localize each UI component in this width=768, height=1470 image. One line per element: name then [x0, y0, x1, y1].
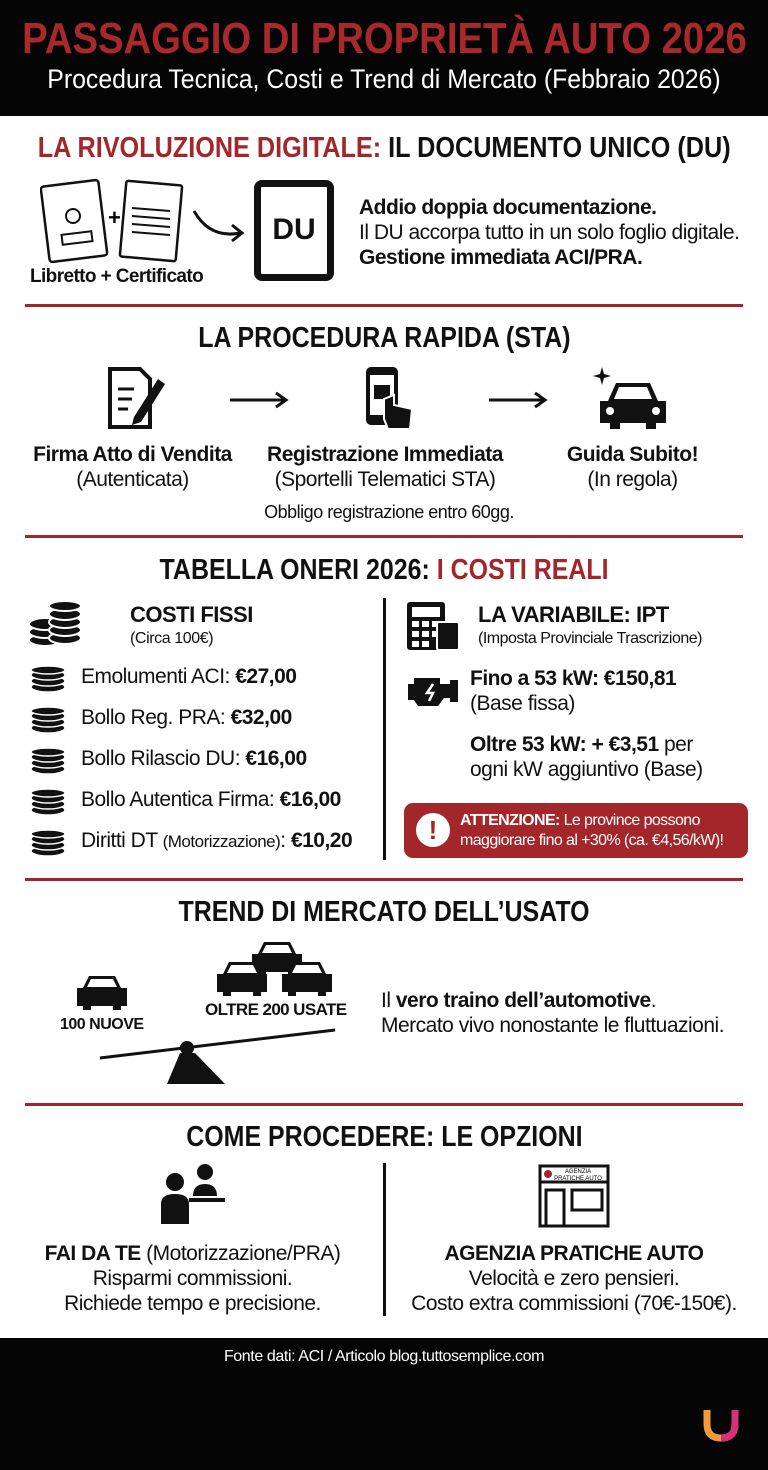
list: fixed costs: Emolumenti ACI: €27,00 [81, 665, 296, 688]
list: fixed costs [32, 665, 352, 856]
icon: document signing [108, 367, 165, 429]
section 3 heading: TABELLA ONERI 2026: I COSTI REALI [159, 554, 608, 586]
subtitle: Procedura Tecnica, Costi e Trend di Mercato (Febbraio 2026) [47, 64, 721, 94]
option: fai da te: Richiede tempo e precisione. [64, 1292, 321, 1315]
icon: coins [30, 602, 80, 645]
text: DU description [359, 196, 739, 269]
option: agenzia: Costo extra commissioni (70€-150€). [411, 1292, 737, 1315]
chart: seesaw new vs used: OLTRE 200 USATE [205, 1000, 347, 1019]
panel: IPT [404, 602, 748, 858]
step 3: Guida Subito! [567, 443, 698, 466]
callout: attenzione [404, 803, 748, 858]
callout: attenzione: ATTENZIONE: Le province possono [460, 812, 700, 829]
footer [0, 1338, 768, 1470]
step 1 [33, 367, 232, 491]
step 2: (Sportelli Telematici STA) [275, 468, 495, 491]
icon: DU tablet [254, 180, 334, 281]
section 4 heading: TREND DI MERCATO DELL’USATO [178, 896, 590, 928]
arrow [230, 392, 288, 408]
icon: agency storefront: AGENZIA [565, 1169, 591, 1175]
step 2: Registrazione Immediata [267, 443, 503, 466]
section 5 heading: COME PROCEDERE: LE OPZIONI [186, 1121, 582, 1153]
icon: engine [408, 678, 458, 706]
option: fai da te [45, 1164, 340, 1315]
step 1: (Autenticata) [76, 468, 189, 491]
title: PASSAGGIO DI PROPRIETÀ AUTO 2026 [22, 14, 746, 63]
arrow [192, 210, 244, 242]
panel: costi fissi [30, 602, 352, 856]
panel: IPT: Oltre 53 kW: + €3,51 per [470, 733, 693, 756]
callout: attenzione: maggiorare fino al +30% (ca. €4,56/kW)! [460, 832, 723, 849]
step 3 [567, 367, 698, 491]
text: DU description: Addio doppia documentazione. [359, 196, 656, 219]
list: fixed costs: Diritti DT (Motorizzazione): €10,20 [81, 829, 352, 852]
icon: logo [704, 1410, 738, 1442]
panel: IPT: ogni kW aggiuntivo (Base) [470, 758, 703, 781]
chart: seesaw new vs used: 100 NUOVE [60, 1016, 144, 1033]
step 2 [267, 367, 504, 491]
text: market trend: Il vero traino dell’automotive. [381, 989, 656, 1012]
chart: seesaw new vs used [60, 942, 347, 1084]
option: agenzia [411, 1164, 737, 1315]
icon: libretto + certificato: Libretto + Certificato [30, 266, 203, 287]
callout: attenzione: ! [429, 815, 437, 845]
panel: IPT: (Base fissa) [470, 692, 575, 715]
list: fixed costs: Bollo Rilascio DU: €16,00 [81, 747, 307, 770]
option: agenzia: Velocità e zero pensieri. [469, 1267, 679, 1290]
icon: libretto + certificato [30, 178, 203, 287]
option: agenzia: AGENZIA PRATICHE AUTO [444, 1242, 704, 1265]
text: DU description: Gestione immediata ACI/PRA. [359, 246, 642, 269]
step 1: Firma Atto di Vendita [33, 443, 232, 466]
section 1 heading: LA RIVOLUZIONE DIGITALE: IL DOCUMENTO UNICO (DU) [38, 132, 730, 164]
icon: agency storefront [538, 1164, 610, 1228]
option: fai da te: FAI DA TE (Motorizzazione/PRA) [45, 1242, 340, 1265]
list: fixed costs: Bollo Reg. PRA: €32,00 [81, 706, 292, 729]
list: fixed costs: Bollo Autentica Firma: €16,00 [81, 788, 341, 811]
header [0, 0, 768, 116]
panel: IPT: Fino a 53 kW: €150,81 [470, 667, 676, 690]
text: DU description: Il DU accorpa tutto in un solo foglio digitale. [359, 221, 739, 244]
note: Obbligo registrazione entro 60gg. [264, 502, 514, 522]
icon: calculator [407, 602, 458, 650]
arrow [489, 392, 548, 408]
source text: Fonte dati: ACI / Articolo blog.tuttosemplice.com [224, 1348, 544, 1365]
icon: agency storefront: PRATICHE AUTO [554, 1176, 602, 1182]
icon: car [593, 367, 666, 429]
panel: costi fissi: COSTI FISSI [130, 602, 253, 627]
panel: costi fissi: (Circa 100€) [130, 630, 213, 647]
step 3: (In regola) [587, 468, 678, 491]
icon: libretto + certificato: + [108, 205, 121, 230]
icon: people at desk [161, 1164, 225, 1224]
panel: IPT: (Imposta Provinciale Trascrizione) [478, 630, 702, 647]
icon: DU tablet: DU [272, 213, 316, 246]
icon: phone tap [366, 367, 411, 428]
panel: IPT: LA VARIABILE: IPT [478, 602, 669, 627]
text: market trend [381, 989, 724, 1037]
text: market trend: Mercato vivo nonostante le fluttuazioni. [381, 1014, 724, 1037]
section 2 heading: LA PROCEDURA RAPIDA (STA) [198, 322, 570, 354]
option: fai da te: Risparmi commissioni. [93, 1267, 292, 1290]
